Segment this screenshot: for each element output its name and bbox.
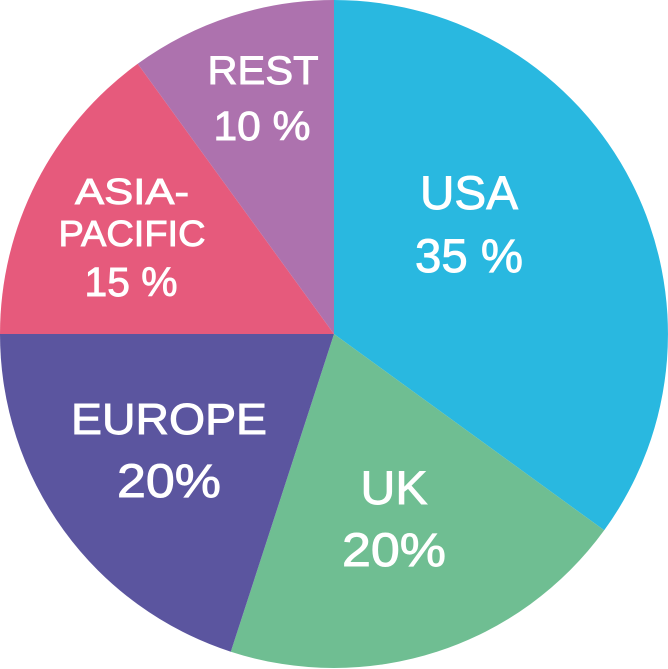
slice: USA 35%: 35 % xyxy=(415,229,523,282)
slice: USA 35%: USA xyxy=(420,166,519,219)
slice: Asia-Pacific 15%: ASIA- xyxy=(75,171,189,212)
slice: Asia-Pacific 15%: PACIFIC xyxy=(58,213,206,254)
slice: Rest 10% xyxy=(138,0,334,334)
slice: UK 20% xyxy=(231,334,604,668)
slice: Rest 10%: REST xyxy=(208,49,318,93)
slice: Europe 20%: EUROPE xyxy=(71,395,267,444)
slice: Asia-Pacific 15%: 15 % xyxy=(84,259,178,305)
slice: UK 20%: UK xyxy=(360,461,428,514)
slice: USA 35% xyxy=(334,0,668,530)
slice: Rest 10%: 10 % xyxy=(214,103,310,149)
slice: Europe 20% xyxy=(0,334,334,652)
slice: Asia-Pacific 15% xyxy=(0,64,334,334)
slice: Europe 20%: 20% xyxy=(117,454,221,507)
slice: UK 20%: 20% xyxy=(342,523,446,576)
